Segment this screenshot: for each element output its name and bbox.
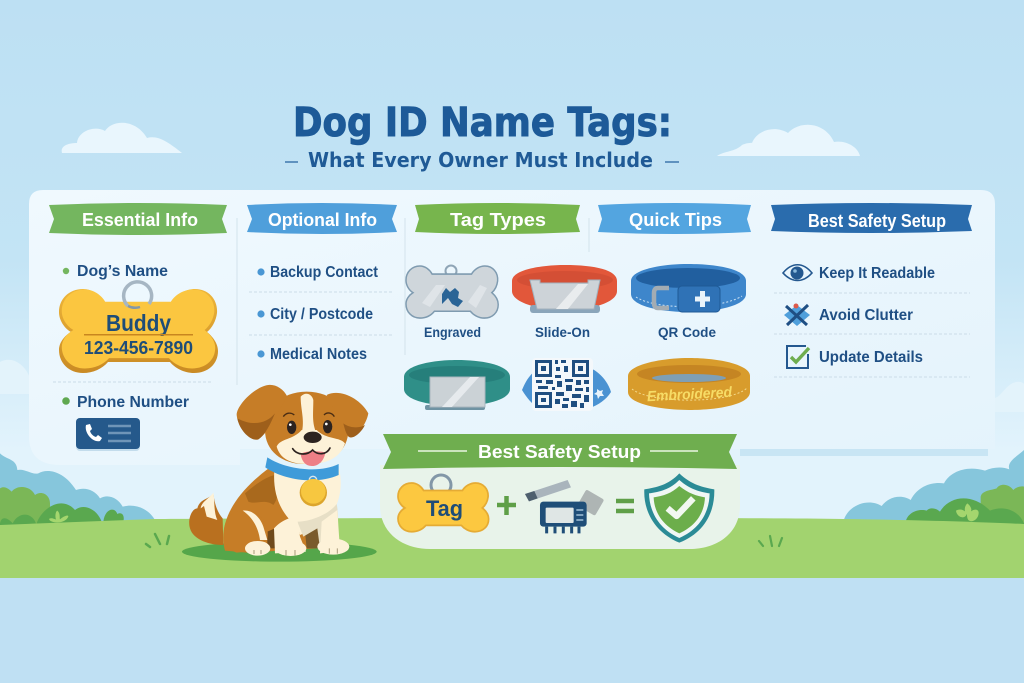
cloud: left edge <box>0 360 30 394</box>
heading banner: best safety setup <box>771 203 972 233</box>
hills and bushes: right <box>844 450 1024 527</box>
label: engraved: Engraved <box>424 324 481 340</box>
panel: safety formula <box>380 434 740 549</box>
tag: teal collar with plate <box>404 360 510 410</box>
cloud: top right <box>717 125 860 156</box>
item: dog's name: Dog’s Name <box>77 263 168 280</box>
hills and bushes: left <box>0 453 155 530</box>
heading banner: essential info <box>49 203 227 235</box>
heading banner: best safety setup: Best Safety Setup <box>808 210 946 231</box>
heading banner: tag types: Tag Types <box>450 209 546 230</box>
label: qr code: QR Code <box>658 324 716 340</box>
ribbon heading: best safety setup <box>383 434 737 469</box>
panel: best safety setup list <box>771 203 972 377</box>
item: phone number: Phone Number <box>77 394 189 411</box>
subtitle: What Every Owner Must Include <box>308 148 653 172</box>
main panel background <box>29 190 995 465</box>
cloud: right edge <box>995 382 1024 412</box>
icon: check shield <box>644 473 714 543</box>
formula pill background <box>380 465 740 549</box>
icon: yellow tag bone <box>398 475 489 532</box>
item: backup contact: Backup Contact <box>270 264 379 281</box>
icon: yellow bone name tag: 123-456-7890 <box>84 338 193 358</box>
item: city / postcode: City / Postcode <box>270 306 373 323</box>
heading banner: optional info: Optional Info <box>268 209 377 230</box>
tag: red slide-on collar <box>512 265 617 313</box>
heading banner: tag types <box>415 203 580 234</box>
heading banner: quick tips <box>598 203 751 234</box>
tag: embroidered gold collar: Embroidered <box>647 385 733 405</box>
panel: optional info <box>247 203 397 363</box>
tag: qr code tag <box>522 358 611 411</box>
icon: yellow bone name tag <box>59 282 218 373</box>
item: update details: Update Details <box>819 349 923 366</box>
icon: microchip device <box>525 480 604 533</box>
cloud: top left <box>62 123 182 153</box>
tag: blue buckle collar <box>631 264 746 312</box>
heading banner: optional info <box>247 203 397 234</box>
grass tufts: right <box>759 536 782 546</box>
title: Dog ID Name Tags: <box>293 100 672 146</box>
heading banner: quick tips: Quick Tips <box>629 209 722 230</box>
panel: essential info <box>49 203 227 451</box>
item: keep it readable <box>783 265 935 282</box>
dog mascot <box>182 385 377 562</box>
item: medical notes: Medical Notes <box>270 346 367 363</box>
panel: tag types <box>404 203 751 411</box>
ribbon heading: best safety setup: Best Safety Setup <box>478 441 641 462</box>
plus sign <box>497 496 516 515</box>
item: avoid clutter: Avoid Clutter <box>819 307 913 324</box>
heading banner: essential info: Essential Info <box>82 209 198 230</box>
item: avoid clutter <box>784 304 913 326</box>
grass ground <box>0 518 1024 578</box>
tag: engraved silver bone <box>406 266 498 318</box>
grass tufts: left <box>146 534 169 547</box>
icon: yellow tag bone: Tag <box>426 496 463 521</box>
icon: yellow bone name tag: Buddy <box>106 310 171 336</box>
tag: embroidered gold collar <box>628 358 750 410</box>
item: update details <box>787 346 923 368</box>
label: slide-on: Slide-On <box>535 324 590 340</box>
item: keep it readable: Keep It Readable <box>819 265 935 282</box>
equals sign <box>616 501 634 511</box>
icon: phone card <box>76 418 140 451</box>
